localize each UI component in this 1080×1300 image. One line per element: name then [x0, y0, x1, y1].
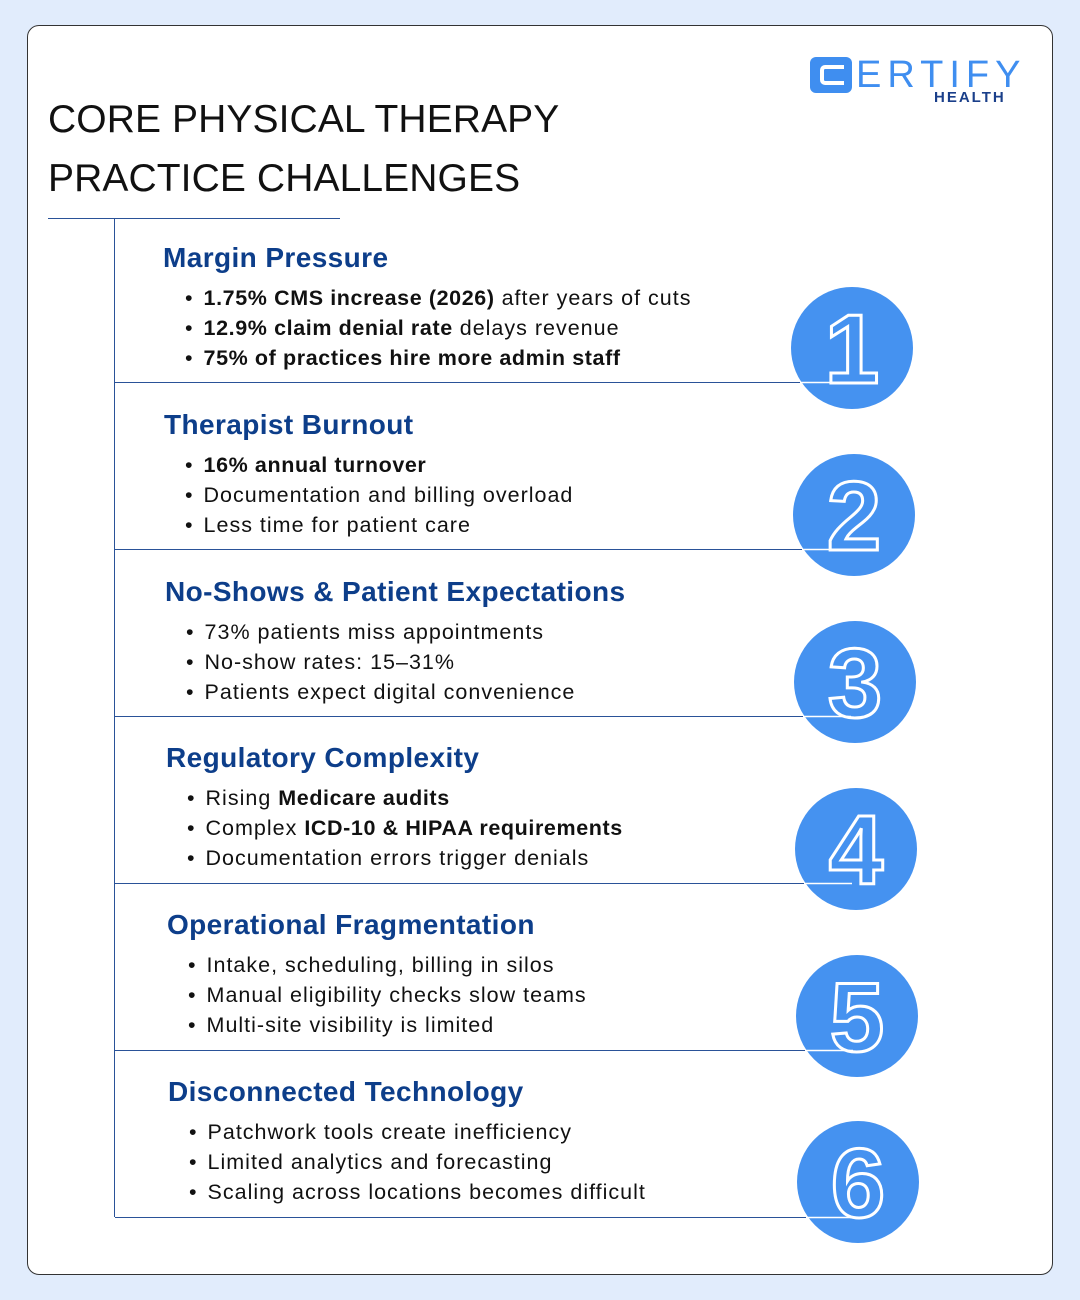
section 2: [164, 409, 573, 537]
circle 3: 3: [828, 628, 882, 738]
section 2: Documentation and billing overload: [204, 483, 573, 507]
section 1: [163, 242, 691, 370]
section 5: Manual eligibility checks slow teams: [207, 983, 587, 1007]
circle 2: 2: [827, 461, 881, 571]
section 4: Rising Medicare audits: [206, 786, 450, 810]
section 5: Operational Fragmentation: [167, 909, 535, 940]
section 4: Complex ICD-10 & HIPAA requirements: [206, 816, 623, 840]
section 2: Less time for patient care: [204, 513, 471, 537]
section 6: Disconnected Technology: [168, 1076, 524, 1107]
section 4: Regulatory Complexity: [166, 742, 479, 773]
circle 6: 6: [831, 1128, 885, 1238]
section 3: No-Shows & Patient Expectations: [165, 576, 625, 607]
section 1: 1.75% CMS increase (2026) after years of cuts: [204, 286, 691, 310]
logo: C mark: [810, 57, 852, 93]
section 3: No-show rates: 15–31%: [205, 650, 455, 674]
section 2: 16% annual turnover: [204, 453, 426, 477]
section 5: Multi-site visibility is limited: [207, 1013, 494, 1037]
circle 5: 5: [830, 962, 884, 1072]
section 6: Scaling across locations becomes difficult: [208, 1180, 646, 1204]
section 1: 12.9% claim denial rate delays revenue: [204, 316, 620, 340]
logo: [810, 54, 1026, 106]
circle 5: [796, 955, 918, 1077]
logo: health: HEALTH: [934, 89, 1006, 106]
section 3: Patients expect digital convenience: [205, 680, 575, 704]
section 6: Limited analytics and forecasting: [208, 1150, 552, 1174]
section 4: Documentation errors trigger denials: [206, 846, 589, 870]
title: CORE PHYSICAL THERAPY: [48, 98, 559, 141]
section 6: Patchwork tools create inefficiency: [208, 1120, 572, 1144]
section 5: [167, 909, 587, 1037]
title: [48, 98, 559, 200]
logo: wordmark: ERTIFY: [856, 54, 1026, 96]
section 4: [166, 742, 623, 870]
circle 6: [797, 1121, 919, 1243]
title: PRACTICE CHALLENGES: [48, 157, 520, 200]
circle 2: [793, 454, 915, 576]
circle 1: 1: [825, 294, 879, 404]
circle 4: 4: [829, 795, 883, 905]
section 5: Intake, scheduling, billing in silos: [207, 953, 554, 977]
section 2: Therapist Burnout: [164, 409, 413, 440]
section 6: [168, 1076, 646, 1204]
circle 3: [794, 621, 916, 743]
circle 1: [791, 287, 913, 409]
section 1: 75% of practices hire more admin staff: [204, 346, 621, 370]
circle 4: [795, 788, 917, 910]
section 3: [165, 576, 625, 704]
section 1: Margin Pressure: [163, 242, 388, 273]
section 3: 73% patients miss appointments: [205, 620, 544, 644]
